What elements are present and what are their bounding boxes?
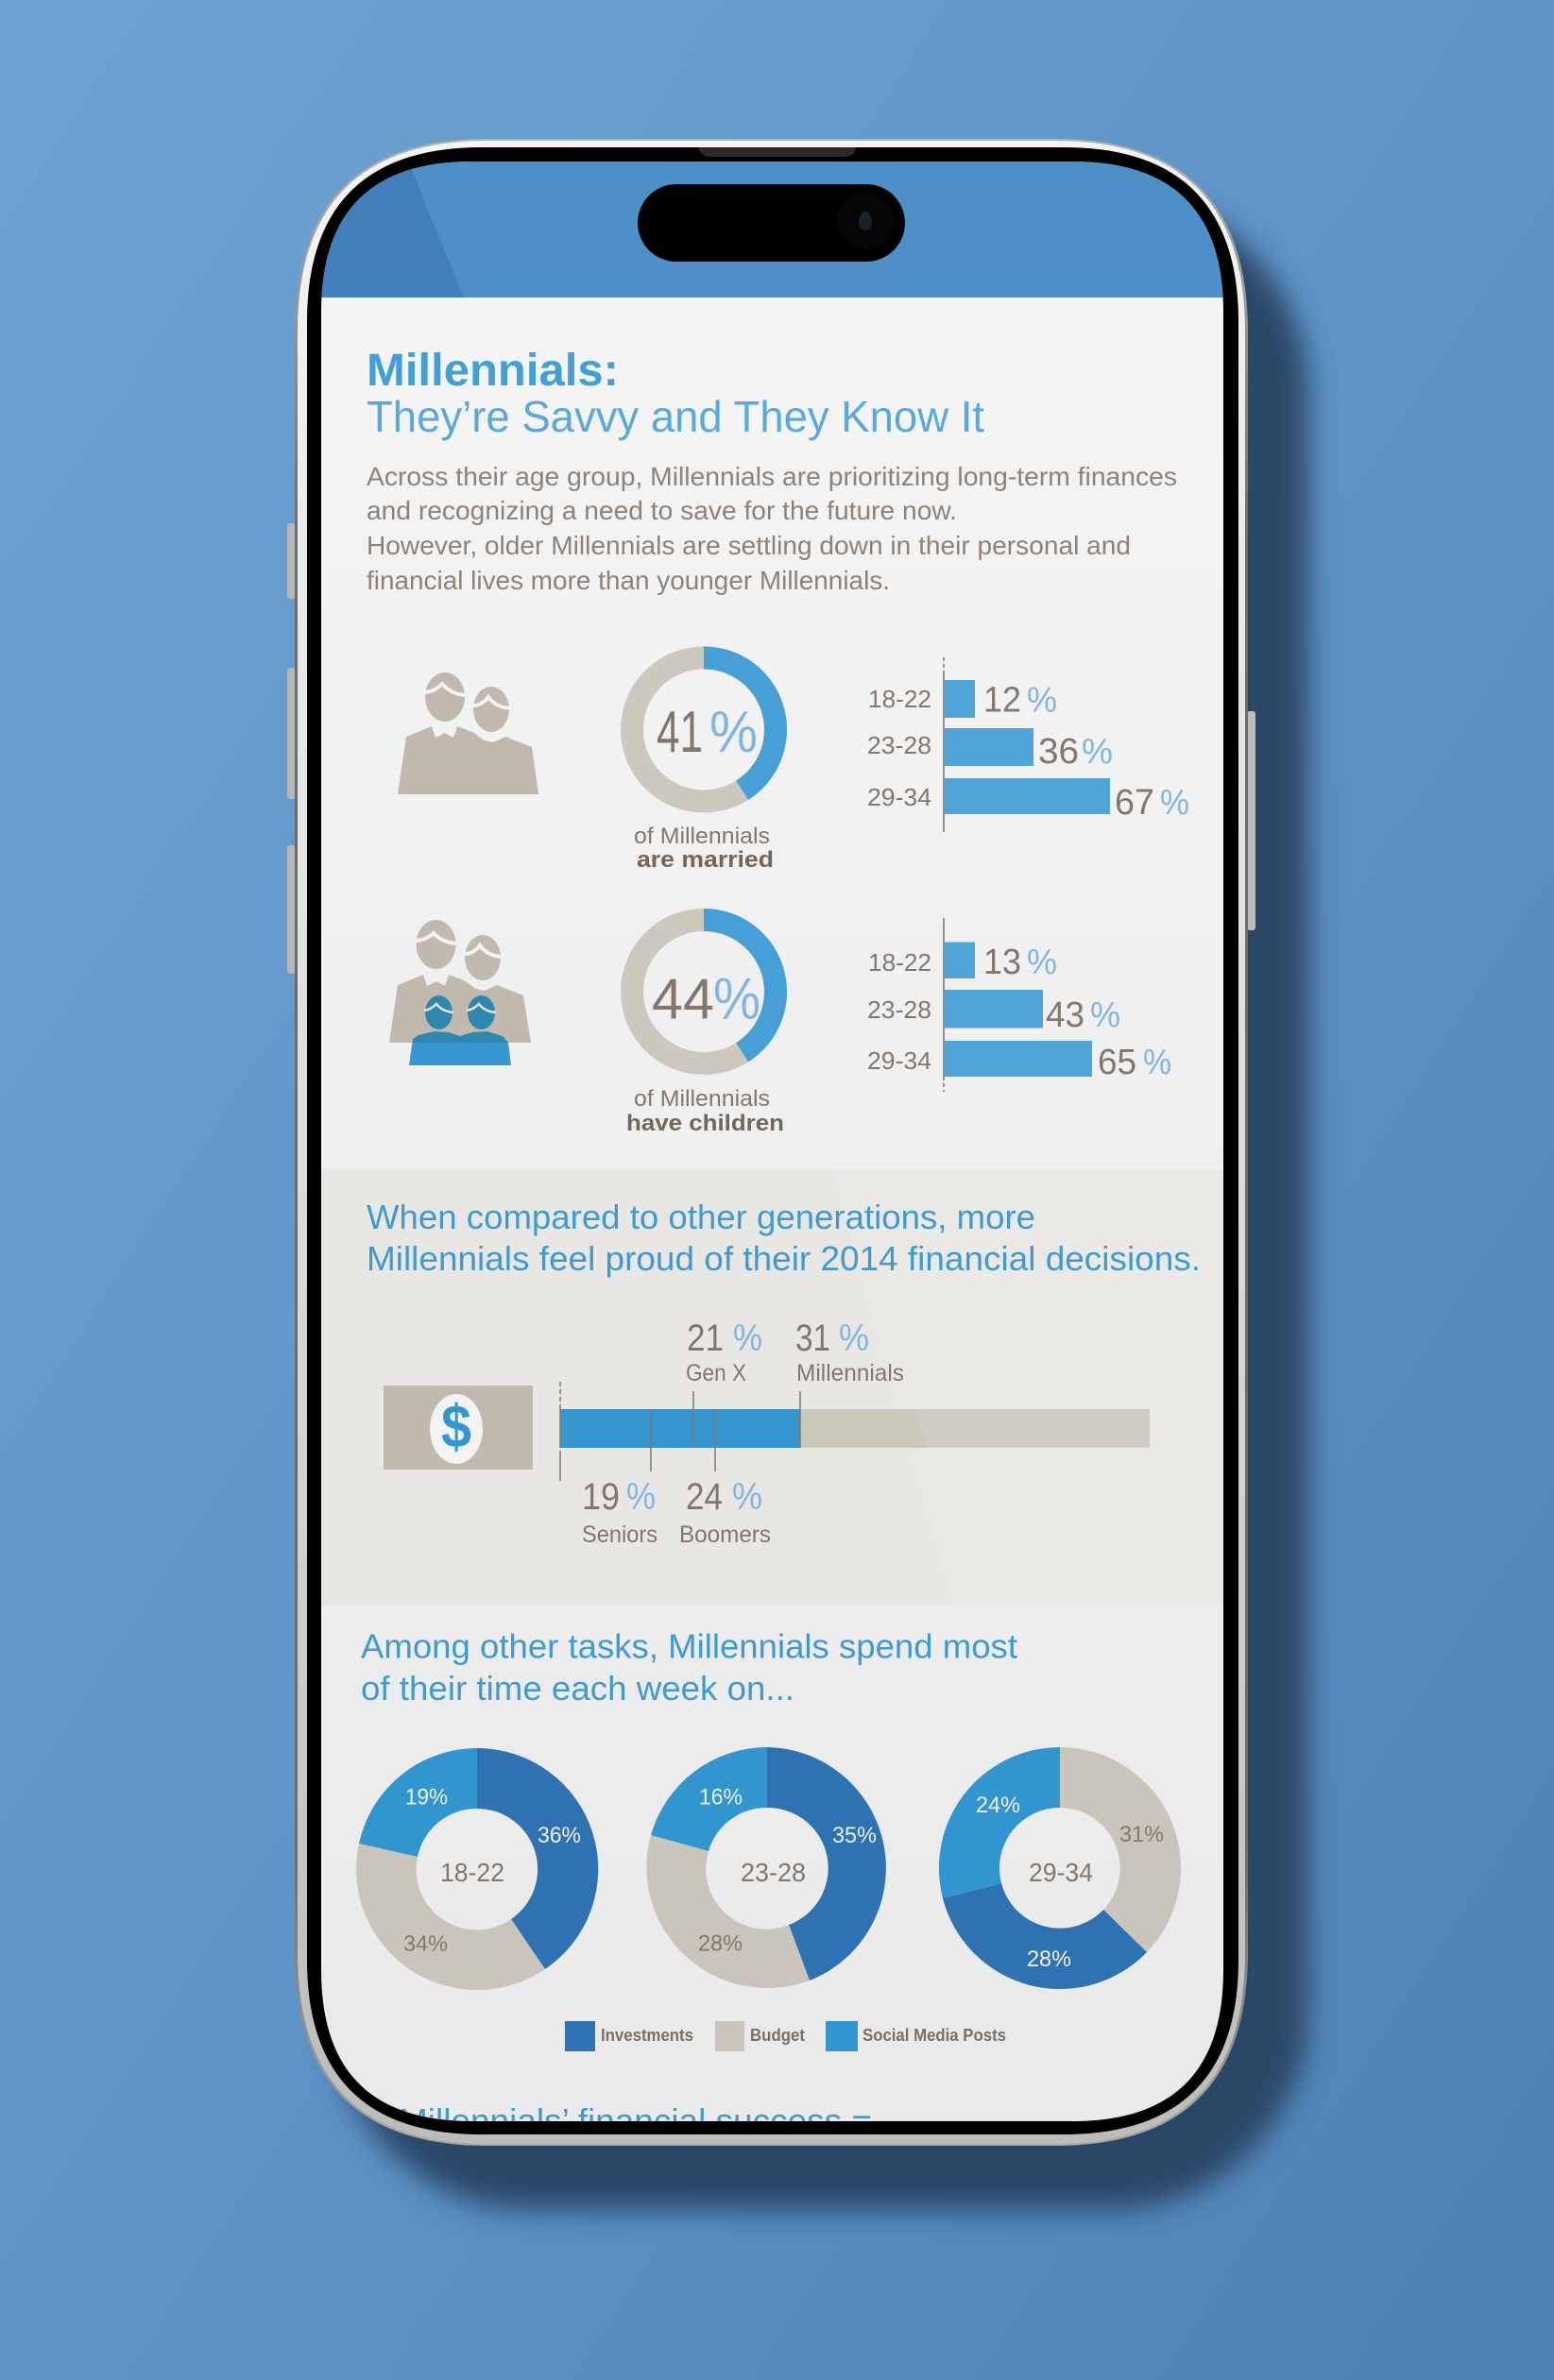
heading: compared to other generations	[367, 1198, 1201, 1278]
bar chart: children by age: 18-22	[868, 948, 931, 977]
label: Boomers 24%	[681, 1483, 771, 1542]
title	[367, 346, 984, 441]
heading: time each week: Among other tasks, Millennials spend most	[361, 1626, 1017, 1666]
caption: are married: of Millennials	[634, 824, 770, 849]
label: Millennials 31%: Millennials	[796, 1360, 904, 1386]
intro text: and recognizing a need to save for the future now.	[367, 496, 957, 525]
bar chart: children by age: 13	[983, 943, 1021, 982]
bar chart: children by age: %	[1143, 1043, 1171, 1082]
bar chart: children by age: %	[1027, 943, 1057, 982]
bezel	[307, 147, 1238, 2134]
caption: are married: are married	[637, 847, 774, 873]
label: Gen X 21%: Gen X	[686, 1360, 746, 1386]
side button right	[1247, 711, 1255, 930]
bar chart: children by age: %	[1090, 995, 1120, 1035]
caption: have children: have children	[626, 1111, 784, 1136]
phone mockup	[287, 139, 1255, 2146]
donut chart: 29-34: 29-34	[1029, 1858, 1093, 1887]
caption: have children: of Millennials	[634, 1086, 770, 1112]
bar chart: married by age: 29-34	[867, 783, 931, 811]
heading: compared to other generations: Millennials feel proud of their 2014 financial decisions.	[367, 1239, 1201, 1278]
bar chart: married by age: 36	[1038, 732, 1079, 772]
label: Seniors 19%: 19	[582, 1476, 620, 1518]
phone shadow	[333, 194, 1308, 2210]
label: Gen X 21%	[687, 1324, 761, 1381]
donut chart: 23-28: 28%	[698, 1930, 743, 1957]
intro text: However, older Millennials are settling down in their personal and	[367, 531, 1131, 560]
donut chart: 18-22	[356, 1748, 598, 1990]
caption: have children	[627, 1090, 782, 1130]
label: Boomers 24%: Boomers	[679, 1522, 771, 1548]
heading: compared to other generations: When compared to other generations, more	[367, 1198, 1035, 1236]
speaker	[699, 147, 856, 157]
label: Gen X 21%: 21	[687, 1318, 724, 1359]
donut chart: 23-28	[646, 1747, 886, 1988]
legend	[565, 2021, 1006, 2051]
label: Millennials 31%: %	[839, 1318, 869, 1359]
legend: Social Media Posts	[862, 2026, 1006, 2045]
bar chart: married by age: %	[1160, 783, 1189, 823]
title: Millennials:	[367, 346, 619, 396]
bar chart: children by age	[867, 918, 1171, 1092]
phone frame	[295, 139, 1248, 2146]
heading: time each week	[361, 1634, 1017, 1700]
header band	[321, 162, 1223, 298]
bar chart: children by age: 65	[1098, 1043, 1136, 1082]
bar chart: married by age: 67	[1115, 783, 1154, 823]
donut chart: 18-22: 18-22	[440, 1858, 504, 1887]
donut chart: 29-34: 24%	[976, 1793, 1020, 1818]
cut-off heading: Millennials’ financial success =	[399, 2101, 872, 2140]
donut chart: 29-34: 31%	[1119, 1822, 1164, 1847]
donut chart: 23-28: 16%	[699, 1785, 743, 1810]
intro text	[367, 462, 1177, 595]
legend: Budget	[750, 2026, 805, 2045]
intro text: Across their age group, Millennials are prioritizing long-term finances	[367, 462, 1177, 491]
donut: 41% married: %	[709, 700, 758, 765]
donut chart: 23-28: 35%	[832, 1823, 877, 1848]
side buttons left	[287, 523, 296, 974]
screen	[321, 162, 1223, 2140]
donut: 44% children: 44	[652, 968, 714, 1031]
icon: married couple	[398, 672, 538, 794]
bar chart: married by age	[867, 657, 1189, 832]
legend: Investments	[601, 2026, 693, 2045]
caption: are married	[635, 827, 773, 867]
icon: family with children	[389, 920, 531, 1065]
bar chart: married by age: 23-28	[867, 731, 931, 759]
donut chart: 23-28: 23-28	[741, 1858, 806, 1887]
donut chart: 18-22: 34%	[403, 1931, 448, 1957]
label: Boomers 24%: %	[732, 1476, 762, 1518]
label: Boomers 24%: 24	[686, 1476, 723, 1518]
donut chart: 18-22: 19%	[405, 1785, 448, 1810]
bar chart: children by age: 23-28	[867, 995, 931, 1024]
bar chart: married by age: %	[1027, 680, 1057, 720]
icon: dollar bill: $	[441, 1392, 471, 1460]
bar chart: married by age: 12	[983, 680, 1021, 720]
donut chart: 29-34: 28%	[1027, 1946, 1071, 1972]
label: Millennials 31%	[796, 1324, 903, 1381]
label: Seniors 19%: %	[626, 1476, 656, 1518]
label: Gen X 21%: %	[733, 1318, 762, 1359]
donut: 41% married: 41	[657, 700, 703, 765]
compare section band	[321, 1169, 1223, 1606]
progress bar: pride by generation	[560, 1382, 1150, 1481]
donut: 41% married	[632, 657, 776, 801]
bar chart: married by age: 18-22	[868, 685, 931, 713]
title: They’re Savvy and They Know It	[367, 392, 984, 441]
label: Seniors 19%	[583, 1483, 657, 1542]
bar chart: married by age: %	[1082, 732, 1113, 772]
donut chart: 29-34	[939, 1747, 1181, 1989]
heading: time each week: of their time each week on...	[361, 1669, 794, 1708]
intro text: financial lives more than younger Millennials.	[367, 566, 890, 595]
bar chart: children by age: 43	[1046, 995, 1084, 1035]
donut: 44% children	[632, 920, 776, 1063]
bar chart: children by age: 29-34	[867, 1046, 931, 1075]
dynamic island	[638, 184, 905, 262]
label: Millennials 31%: 31	[795, 1318, 830, 1359]
donut chart: 18-22: 36%	[538, 1823, 581, 1848]
icon: dollar bill	[384, 1386, 533, 1470]
label: Seniors 19%: Seniors	[582, 1522, 657, 1548]
donut: 44% children: %	[713, 967, 760, 1032]
